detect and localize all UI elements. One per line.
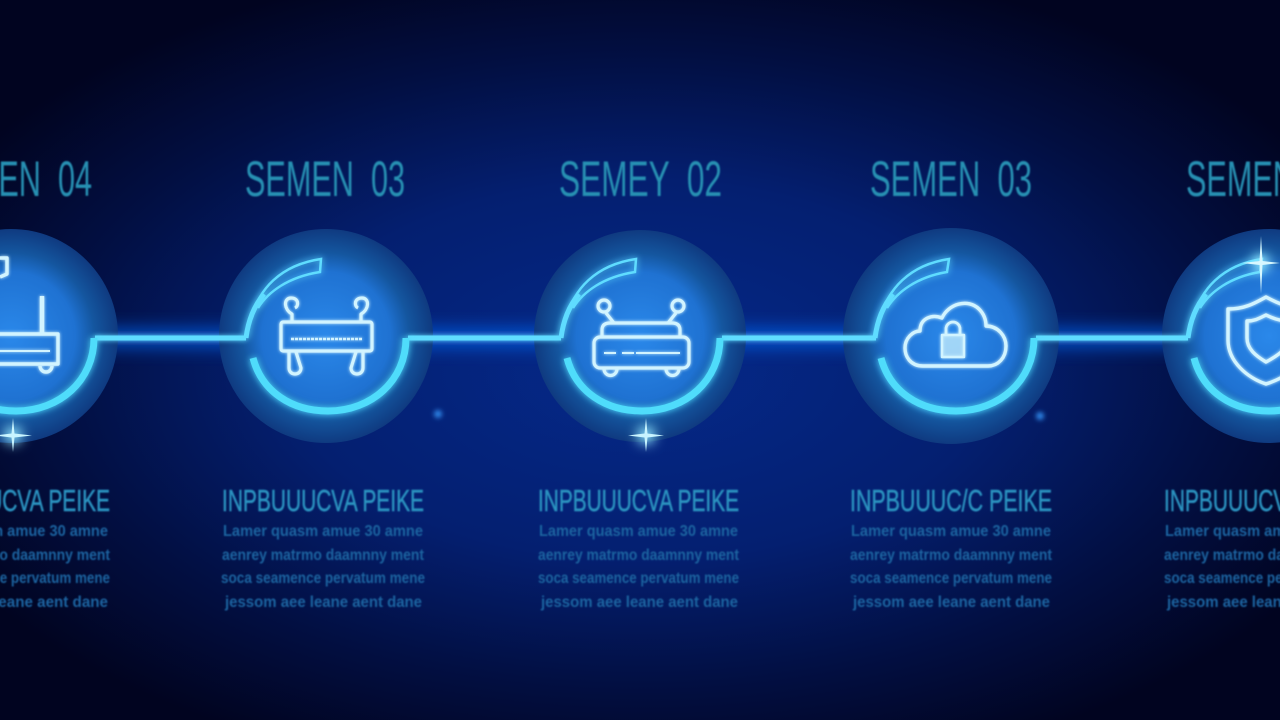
node 3 disc (534, 230, 746, 442)
glow band behind connector (60, 330, 1280, 346)
text block: node 2 (221, 483, 425, 611)
icon: router node 1 (0, 258, 58, 372)
ring: node 3 (561, 259, 720, 411)
icon: shield node 5 (1228, 297, 1280, 384)
connector line (95, 336, 1188, 340)
ring: node 5 (1188, 259, 1280, 411)
faint light specks (434, 410, 1044, 420)
node 2 disc (219, 229, 433, 443)
icon: cloud with padlock node 4 (905, 303, 1006, 366)
node 5 disc (1162, 229, 1280, 443)
icon: router node 3 (594, 300, 689, 376)
icon: router node 2 (281, 298, 372, 374)
node 4 disc (843, 228, 1059, 444)
sparkle: node 5 (1242, 236, 1280, 294)
text block: node 2: jessom aee leane aent dane (224, 594, 422, 611)
text block: node 2: Lamer quasm amue 30 amne (223, 523, 423, 540)
node 1 disc (0, 229, 118, 443)
sparkle: node 3 (628, 418, 664, 452)
text block: node 4: jessom aee leane aent dane (852, 594, 1050, 611)
ring: node 4 (875, 259, 1034, 411)
text block: node 3 (538, 483, 740, 611)
text block: node 3: soca seamence pervatum mene (538, 570, 739, 587)
ring: node 1 (0, 338, 94, 411)
heading: node 3: SEMEY 02 (559, 151, 722, 207)
text block: node 3: INPBUUUCVA PEIKE (538, 483, 739, 518)
text block: node 2: soca seamence pervatum mene (221, 570, 425, 587)
heading: node 2: SEMEN 03 (245, 151, 405, 207)
text block: node 4: INPBUUUC/C PEIKE (850, 483, 1052, 518)
text block: node 4: soca seamence pervatum mene (850, 570, 1052, 587)
text block: node 1 (0, 483, 111, 611)
ring: node 2 (246, 259, 406, 411)
text block: node 3: aenrey matrmo daamnny ment (538, 547, 740, 564)
text block: node 4: Lamer quasm amue 30 amne (851, 523, 1051, 540)
text block: node 3: jessom aee leane aent dane (540, 594, 738, 611)
text block: node 2: INPBUUUCVA PEIKE (222, 483, 424, 518)
text block: node 3: Lamer quasm amue 30 amne (539, 523, 738, 540)
text block: node 4: aenrey matrmo daamnny ment (850, 547, 1053, 564)
sparkle: node 1 (0, 418, 32, 452)
heading: node 4: SEMEN 03 (870, 151, 1032, 207)
text block: node 2: aenrey matrmo daamnny ment (222, 547, 425, 564)
text block: node 4 (850, 483, 1053, 611)
text block: node 5 (1164, 483, 1280, 611)
